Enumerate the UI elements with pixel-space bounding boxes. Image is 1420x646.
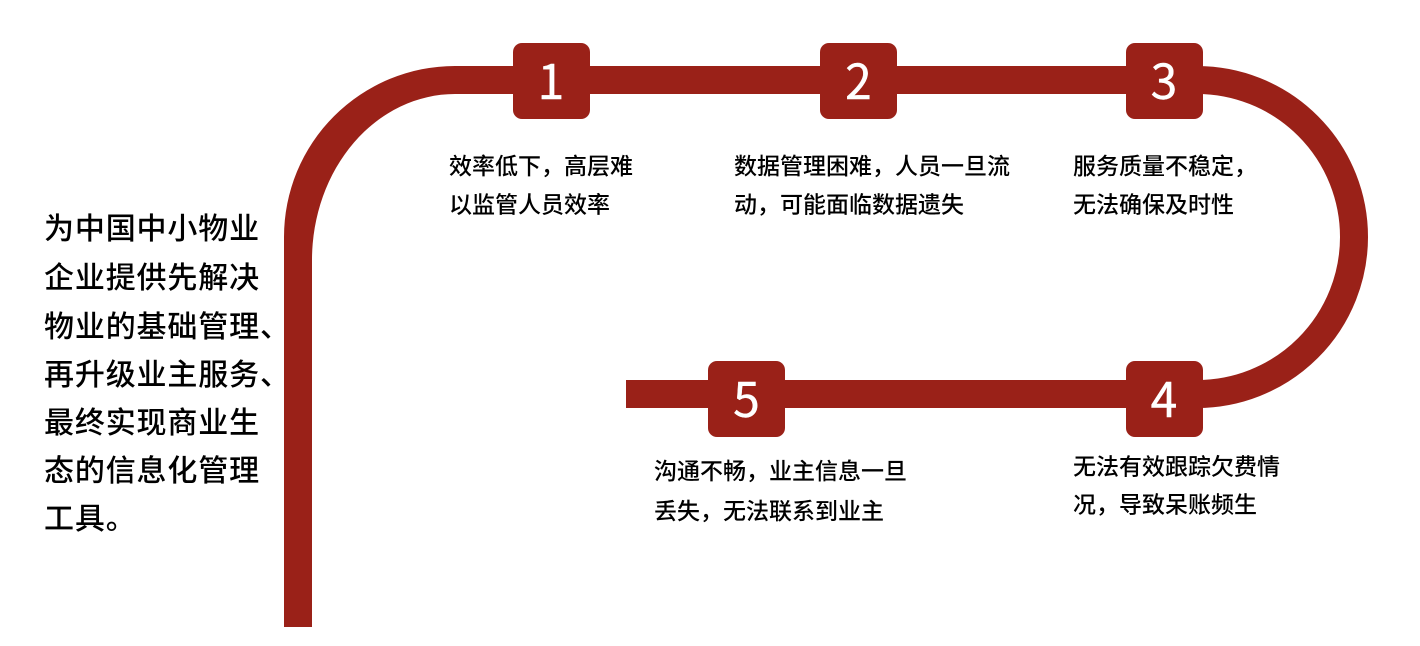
step 2 caption	[734, 147, 1010, 220]
step 2 caption: 数据管理困难，人员一旦流	[734, 147, 1010, 181]
intro text: 再升级业主服务、	[44, 350, 291, 394]
step 5 caption: 沟通不畅，业主信息一旦	[654, 452, 907, 486]
intro text: 最终实现商业生	[44, 398, 260, 442]
step 2 badge: 2	[845, 43, 872, 113]
step 1 caption: 以监管人员效率	[449, 186, 610, 220]
step 3 badge	[1126, 43, 1203, 119]
step 4 badge	[1126, 361, 1203, 437]
step 1 caption: 效率低下，高层难	[449, 147, 633, 181]
step 1 badge	[513, 43, 590, 119]
intro text: 工具。	[44, 494, 137, 538]
step 3 badge: 3	[1151, 43, 1177, 113]
winding road path	[284, 66, 1354, 627]
step 5 caption: 丢失，无法联系到业主	[654, 492, 884, 526]
intro text: 物业的基础管理、	[44, 302, 291, 346]
step 3 caption: 无法确保及时性	[1073, 186, 1234, 220]
intro text: 为中国中小物业	[44, 204, 260, 248]
step 4 caption: 况，导致呆账频生	[1073, 486, 1257, 520]
intro text: 态的信息化管理	[44, 446, 260, 490]
step 2 badge	[820, 43, 897, 119]
intro text	[44, 204, 291, 538]
step 5 caption	[654, 452, 907, 526]
intro text: 企业提供先解决	[44, 253, 260, 297]
step 4 badge: 4	[1151, 361, 1177, 431]
step 5 badge: 5	[733, 361, 760, 431]
step 2 caption: 动，可能面临数据遗失	[734, 186, 964, 220]
step 3 caption	[1073, 147, 1257, 220]
step 4 caption: 无法有效跟踪欠费情	[1073, 448, 1280, 482]
step 1 badge: 1	[538, 43, 564, 113]
step 4 caption	[1073, 448, 1280, 520]
step 1 caption	[449, 147, 633, 220]
step 5 badge	[708, 361, 785, 437]
step 3 caption: 服务质量不稳定，	[1073, 147, 1257, 181]
